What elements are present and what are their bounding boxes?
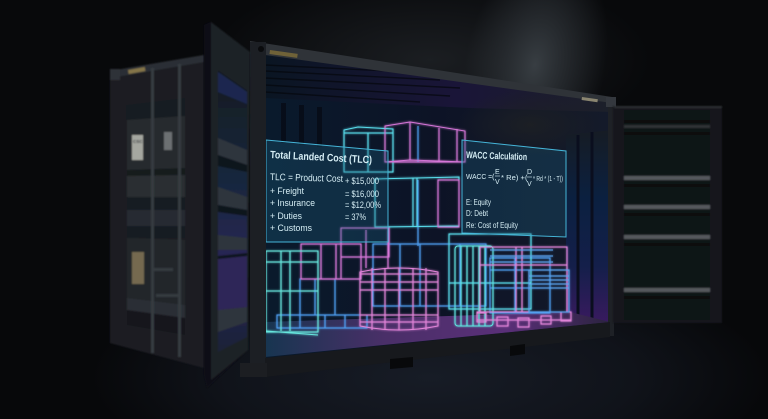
- ambient haze behind container: [210, 0, 650, 150]
- formula lines: + Duties: [270, 211, 302, 222]
- WACC formula: (: [525, 173, 528, 182]
- blue boxes: [277, 126, 550, 328]
- CSC label: [132, 135, 143, 160]
- pink top box: [301, 122, 465, 279]
- hazard mark top: [269, 50, 298, 58]
- right corner post: [608, 98, 614, 336]
- ceiling corrugation: [265, 65, 460, 102]
- door lock rods: [151, 64, 181, 357]
- formula lines: + Freight: [270, 186, 304, 197]
- WACC formula: [466, 169, 563, 188]
- WACC legend: Re: Cost of Equity: [466, 221, 519, 230]
- data plate: [164, 132, 172, 150]
- back wall corrugation: [281, 103, 322, 147]
- WACC formula: * Rd * (1 - T)): [533, 174, 563, 183]
- formula lines: = $12,00%: [345, 200, 381, 211]
- door ribs: [624, 125, 710, 292]
- bottom rail: [265, 322, 610, 377]
- floor: [265, 312, 610, 357]
- formula lines: = 37%: [345, 212, 366, 223]
- container left closed door: [110, 55, 204, 368]
- formula lines: TLC = Product Cost: [270, 172, 343, 185]
- interior side wall: [566, 130, 612, 325]
- panel: WACC calculation: [462, 140, 566, 237]
- WACC legend: [466, 198, 519, 230]
- heading: total landed cost: Total Landed Cost (TLC): [270, 149, 372, 166]
- interior ceiling: [265, 55, 612, 112]
- top rail: [250, 41, 612, 103]
- WACC formula: (: [492, 172, 495, 181]
- cyan top box: [344, 127, 531, 309]
- wireframe cargo: [266, 122, 571, 335]
- formula lines: = $16,000: [345, 189, 379, 200]
- WACC legend: E: Equity: [466, 198, 492, 207]
- open left door: [204, 22, 250, 388]
- heading: WACC: WACC Calculation: [466, 150, 527, 163]
- formula lines: + Insurance: [270, 198, 315, 209]
- container frame: [240, 41, 616, 377]
- hazard stripes: [128, 67, 145, 74]
- container interior: [265, 55, 612, 358]
- rust label: [132, 252, 144, 284]
- beam haze inside: [455, 90, 605, 160]
- light beam: [442, 0, 628, 197]
- WACC formula: E: [495, 169, 500, 176]
- CSC label: CSC: [133, 139, 143, 144]
- WACC formula: * Re) +: [501, 173, 526, 182]
- WACC legend: D: Debt: [466, 209, 489, 218]
- formula lines: [270, 172, 381, 234]
- ground: [0, 300, 768, 419]
- pink pallet stack: [477, 247, 571, 327]
- formula lines: + $15,000: [345, 176, 379, 187]
- open right door: [613, 106, 722, 323]
- cyan front left shelf: [266, 251, 318, 335]
- formula lines: + Customs: [270, 223, 312, 234]
- left corner post: [250, 42, 266, 375]
- pink cylinder: [360, 268, 438, 330]
- blue dense crate: [490, 250, 569, 312]
- panel: total landed cost: [266, 140, 388, 242]
- WACC formula: WACC =: [466, 172, 492, 181]
- corner casting: [110, 69, 120, 80]
- corrugated recesses: [126, 98, 185, 335]
- WACC formula: V: [495, 179, 500, 186]
- WACC formula: D: [527, 169, 532, 176]
- WACC formula: V: [527, 181, 532, 188]
- cyan cylinder: [455, 246, 493, 326]
